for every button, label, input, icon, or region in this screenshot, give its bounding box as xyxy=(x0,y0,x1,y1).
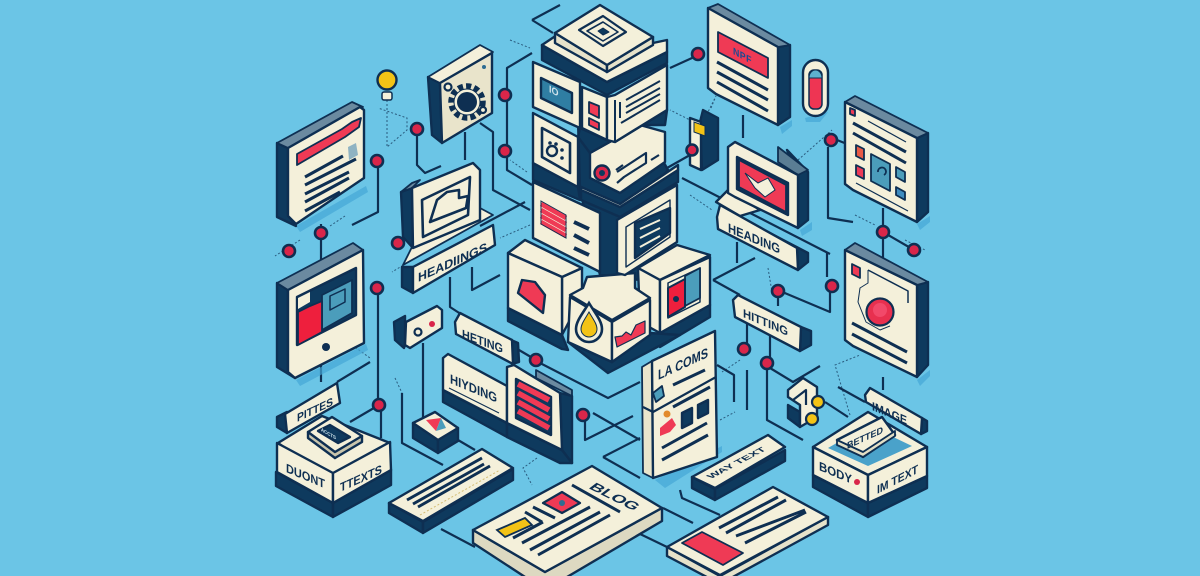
tag: PITTES: PITTES xyxy=(297,395,333,425)
label: IMAGE: IMAGE xyxy=(872,399,907,428)
label: HEADINGS xyxy=(402,225,495,293)
panel: lower left window xyxy=(277,243,364,378)
label: HEADINGS: HEADIINGS xyxy=(418,239,487,285)
bottom right box xyxy=(638,245,710,347)
row 2 dark ledge xyxy=(581,165,678,217)
top cap with icon xyxy=(555,5,653,72)
panel: upper right window xyxy=(845,96,928,222)
panel: gear card xyxy=(428,45,493,143)
text bar block xyxy=(389,449,513,533)
small camera card xyxy=(394,306,442,348)
bottom left box xyxy=(508,240,582,350)
panel: lower right window xyxy=(845,243,928,377)
label: HETING: HETING xyxy=(462,326,503,356)
inner tag BETTED: BETTED xyxy=(847,425,883,452)
label: WAY TEXT: WAY TEXT xyxy=(704,446,769,480)
block: BODY IM TEXT box: IM TEXT xyxy=(877,461,918,497)
tower back core xyxy=(578,120,668,280)
row 3 left card xyxy=(533,182,600,272)
panel: red striped card xyxy=(507,365,572,463)
icon: light bulb xyxy=(378,70,396,100)
bottom center box xyxy=(568,273,680,373)
gadget with yellow buttons xyxy=(788,378,824,427)
block: DUONT TEXTS box xyxy=(276,416,391,517)
row 1 cards: IO xyxy=(549,84,559,100)
row 3 right card xyxy=(617,185,677,275)
row 2 right slab xyxy=(590,125,665,193)
icon: red pill xyxy=(803,60,828,116)
panel: red image card xyxy=(716,142,808,228)
block: DUONT TEXTS box: DUONT xyxy=(286,460,325,491)
inner tag: ACCTS xyxy=(321,427,337,442)
tag: PITTES xyxy=(277,383,340,433)
block: DUONT TEXTS box: TTEXTS xyxy=(340,462,382,495)
label: HIYDING xyxy=(443,354,507,437)
panel: top left text window xyxy=(277,102,364,226)
label: HITTING xyxy=(733,295,811,351)
panel: lower card with red block xyxy=(667,487,828,576)
small icon box xyxy=(413,412,458,453)
row 2 left card xyxy=(533,113,580,200)
panel: NPF document xyxy=(708,4,790,125)
panel: LA COMS article: LA COMS xyxy=(658,346,708,384)
label: IMAGE xyxy=(865,388,927,434)
top slab xyxy=(542,35,667,95)
panel: NPF document: NPF xyxy=(733,46,751,67)
label: HETING xyxy=(455,313,519,364)
icon: gear xyxy=(444,65,486,118)
panel: LA COMS article xyxy=(642,331,717,478)
panel: blog page: BLOG xyxy=(585,480,644,513)
row 1 cards xyxy=(533,62,667,153)
connector nodes xyxy=(283,48,920,421)
block: BODY IM TEXT box: BODY xyxy=(819,458,852,487)
tower: stacked content blocks xyxy=(508,5,710,373)
block: BODY IM TEXT box xyxy=(813,412,927,517)
label: HITTING: HITTING xyxy=(743,306,788,339)
connector lines xyxy=(275,5,925,547)
panel: folder image card xyxy=(401,163,493,265)
soft panel shadows xyxy=(296,112,930,488)
small yellow tag gadget xyxy=(690,110,718,170)
label: WAY TEXT xyxy=(692,435,785,500)
label: HEADING xyxy=(717,205,808,270)
label: HEADING: HEADING xyxy=(728,220,780,257)
label: HIYDING: HIYDING xyxy=(450,371,497,406)
panel: blog page xyxy=(473,466,662,576)
icon: oil drop xyxy=(576,303,602,342)
